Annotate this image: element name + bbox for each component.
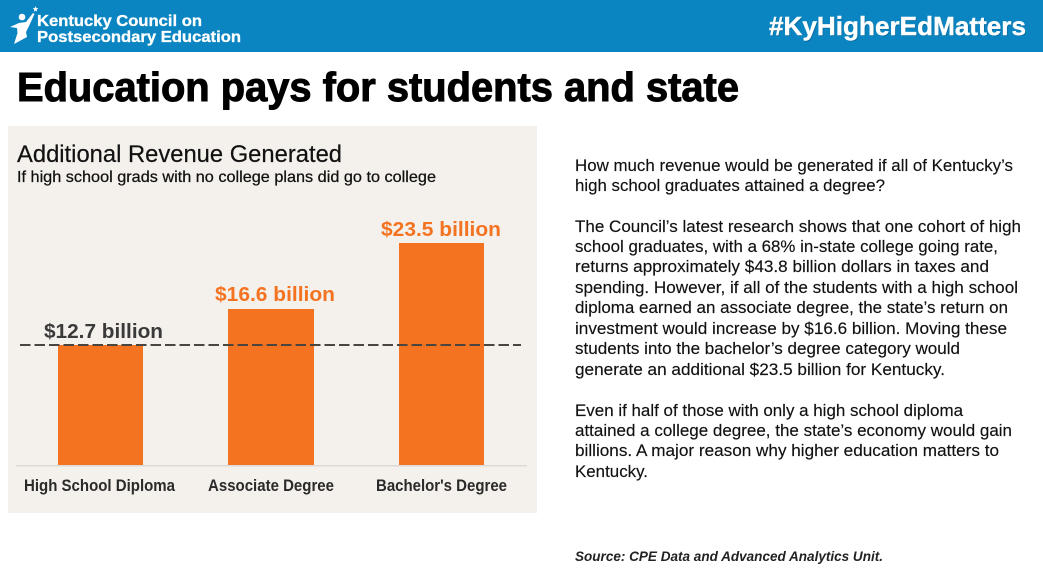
bar: high school diploma xyxy=(58,345,143,465)
hashtag: #KyHigherEdMatters xyxy=(769,11,1026,41)
research paragraph: generate an additional $23.5 billion for Kentucky. xyxy=(575,361,945,379)
value label: bachelor's: $23.5 billion xyxy=(381,218,501,241)
research paragraph: The Council’s latest research shows that one cohort of high xyxy=(575,218,1021,236)
category label: high school: High School Diploma xyxy=(24,477,176,495)
organisation name: Kentucky Council on xyxy=(37,13,202,30)
research paragraph: returns approximately $43.8 billion dollars in taxes and xyxy=(575,258,989,276)
closing paragraph: billions. A major reason why higher education matters to xyxy=(575,442,999,460)
source note: Source: CPE Data and Advanced Analytics Unit. xyxy=(575,548,883,564)
chart subheading: If high school grads with no college plans did go to college xyxy=(17,169,436,186)
research paragraph: diploma earned an associate degree, the state’s return on xyxy=(575,299,1008,317)
organisation name xyxy=(37,13,241,46)
bar: associate degree xyxy=(228,309,314,465)
closing paragraph: Kentucky. xyxy=(575,463,648,481)
research paragraph xyxy=(575,218,1021,379)
research paragraph: students into the bachelor’s degree category would xyxy=(575,340,960,358)
bar chart xyxy=(16,218,527,495)
closing paragraph: Even if half of those with only a high school diploma xyxy=(575,402,964,420)
icon: star figure logo xyxy=(10,6,38,44)
intro question text: How much revenue would be generated if all of Kentucky’s xyxy=(575,157,1013,175)
chart heading: Additional Revenue Generated xyxy=(17,141,342,168)
axis line xyxy=(16,465,527,466)
intro question text: high school graduates attained a degree? xyxy=(575,177,885,195)
organisation name: Postsecondary Education xyxy=(37,29,241,46)
research paragraph: school graduates, with a 68% in-state college going rate, xyxy=(575,238,998,256)
research paragraph: investment would increase by $16.6 billion. Moving these xyxy=(575,320,1007,338)
category label: bachelor's: Bachelor's Degree xyxy=(376,477,507,495)
closing paragraph xyxy=(575,402,1012,481)
title: Education pays for students and state xyxy=(17,64,739,110)
hashtag: #KyHigherEdMatters xyxy=(770,12,1027,42)
intro question text xyxy=(575,157,1013,195)
value label: associate: $16.6 billion xyxy=(215,283,335,306)
bar: bachelor's degree xyxy=(399,243,484,465)
value label: high school: $12.7 billion xyxy=(44,320,163,343)
header band xyxy=(0,0,1043,52)
category label: associate: Associate Degree xyxy=(208,477,334,495)
closing paragraph: attained a college degree, the state’s economy would gain xyxy=(575,422,1012,440)
dashed reference line xyxy=(20,344,521,346)
panel: revenue chart xyxy=(8,126,537,513)
research paragraph: spending. However, if all of the students with a high school xyxy=(575,279,1018,297)
